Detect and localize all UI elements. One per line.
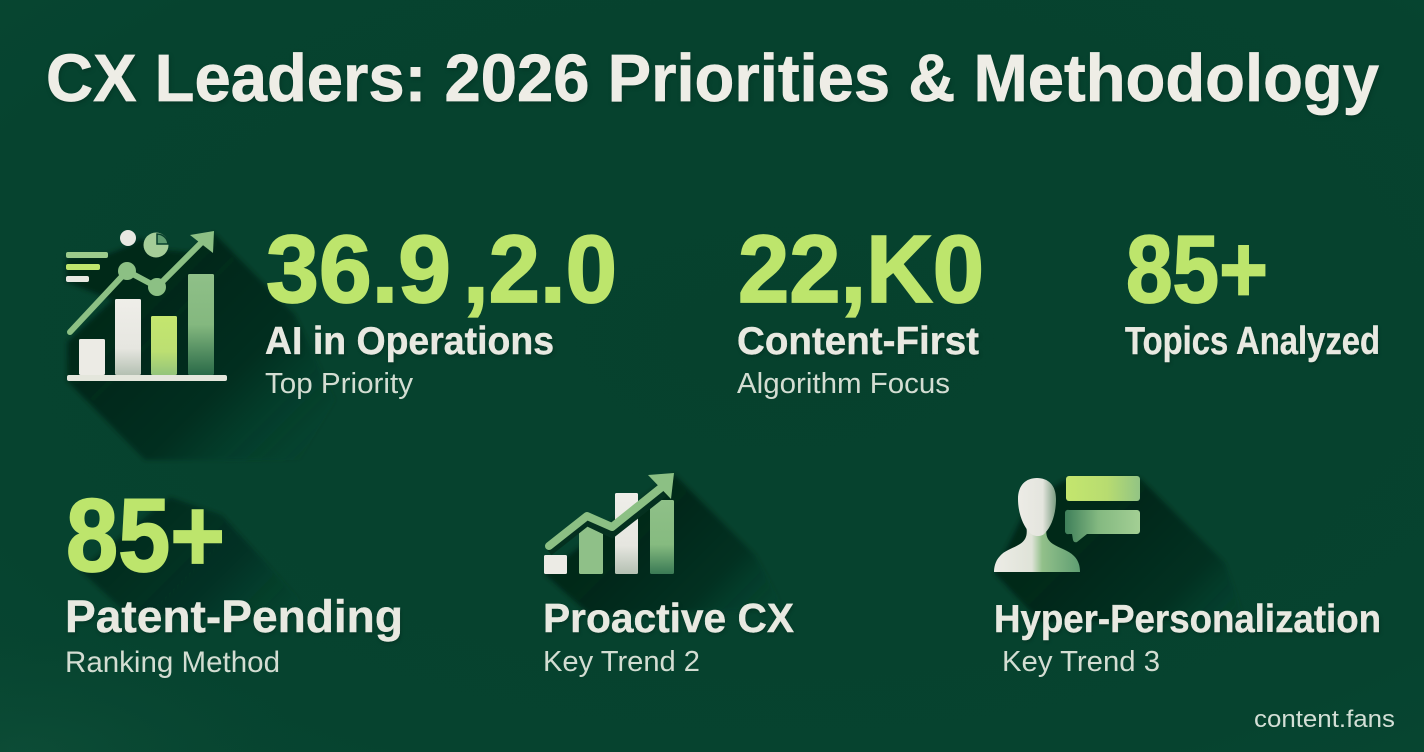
label: AI in Operations: AI in Operations — [265, 320, 554, 363]
title: CX Leaders: 2026 Priorities & Methodology — [46, 41, 1379, 116]
icon: rising bars with arrow — [544, 473, 785, 615]
sublabel: Algorithm Focus: Algorithm Focus — [737, 368, 950, 400]
panel: Proactive CX — [543, 473, 794, 678]
label: Patent-Pending: Patent-Pending — [65, 591, 403, 642]
stat: 36.9 ,2.0: 36.9 — [266, 216, 451, 323]
sublabel: Ranking Method: Ranking Method — [65, 646, 280, 679]
stat: 85+: 85+ — [1126, 216, 1268, 323]
stat: 22,K0: 22,K0 — [738, 216, 984, 323]
label: Proactive CX: Proactive CX — [543, 595, 794, 641]
panel: AI in Operations — [66, 216, 617, 460]
sublabel: Key Trend 3: Key Trend 3 — [1002, 646, 1160, 678]
stat: 85+: 85+ — [66, 478, 225, 594]
stat: 36.9 ,2.0: ,2.0 — [463, 216, 617, 323]
shadow: 85+ — [80, 497, 300, 620]
panel: Content-First — [737, 216, 984, 400]
label: Topics Analyzed: Topics Analyzed — [1125, 320, 1380, 363]
panel: Hyper-Personalization — [994, 476, 1381, 678]
icon: bar chart with rising arrow — [66, 230, 335, 460]
sublabel: Top Priority: Top Priority — [265, 368, 414, 400]
icon: person with speech bubbles — [994, 476, 1245, 622]
label: Hyper-Personalization: Hyper-Personalization — [994, 598, 1381, 641]
sublabel: Key Trend 2: Key Trend 2 — [543, 646, 700, 678]
label: Content-First: Content-First — [737, 320, 979, 363]
stat: 36.9 ,2.0 — [266, 216, 617, 323]
panel: Patent-Pending — [65, 478, 403, 679]
footer: content.fans: content.fans — [1254, 706, 1395, 733]
panel: Topics Analyzed — [1125, 216, 1380, 363]
